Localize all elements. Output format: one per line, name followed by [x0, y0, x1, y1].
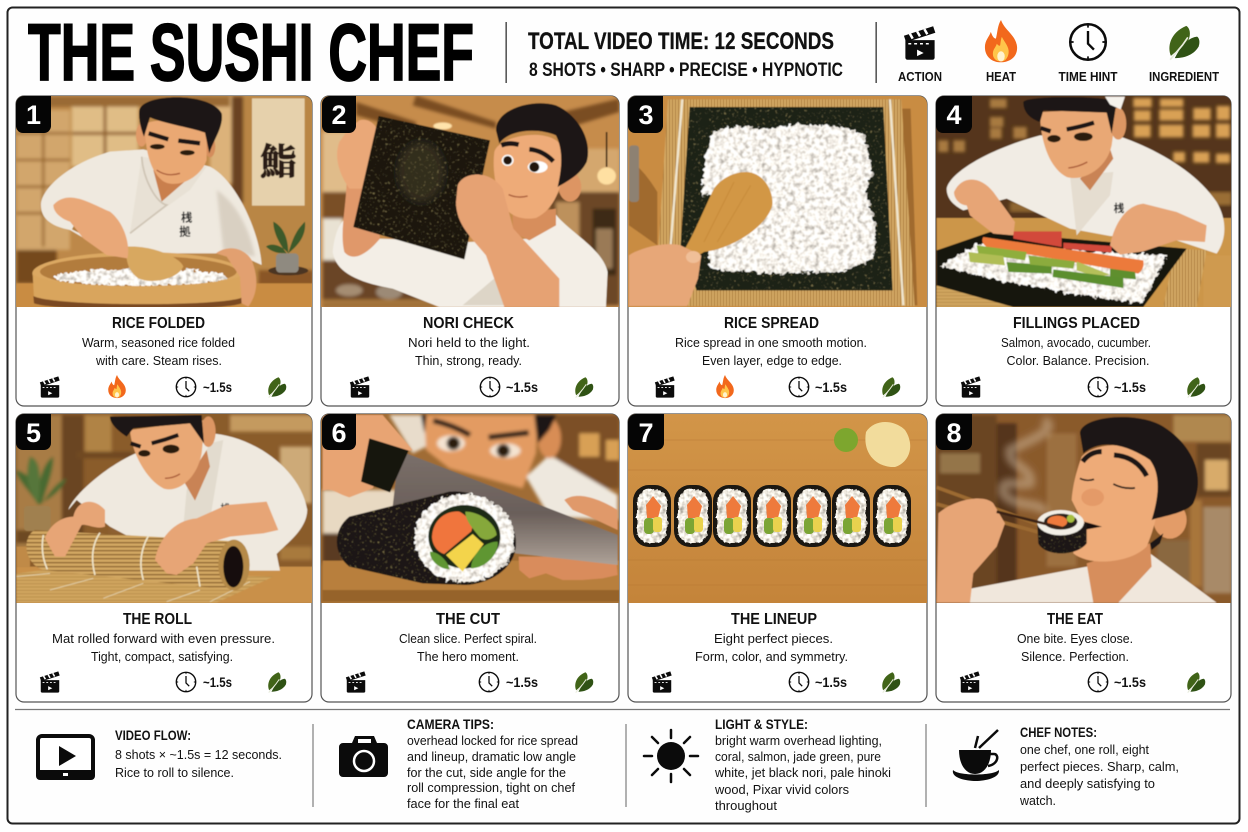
legend: heat: [985, 20, 1017, 84]
front hand: [323, 415, 413, 497]
caption 3: RICE SPREAD: [724, 315, 819, 332]
sushi pieces: [633, 485, 911, 547]
gown: [333, 215, 608, 307]
caption 3: Even layer, edge to edge.: [702, 353, 842, 368]
table: [937, 218, 1232, 308]
subtitle: total video time: TOTAL VIDEO TIME: 12 SECONDS: [528, 28, 834, 55]
footer: light and style: throughout: [715, 798, 777, 813]
footer: chef notes: perfect pieces. Sharp, calm,: [1020, 759, 1179, 774]
caption 5: Tight, compact, satisfying.: [91, 649, 233, 664]
legend: action: ACTION: [898, 69, 942, 84]
badge 4: [936, 96, 972, 133]
icon row 8: [960, 671, 1205, 693]
left arm and hand: [343, 179, 380, 257]
badge 1: [16, 96, 51, 133]
nori: [681, 107, 893, 290]
caption 8: One bite. Eyes close.: [1017, 631, 1133, 646]
panel: shot 1 rice folded: [10, 90, 323, 406]
panel: shot 6 the cut: [316, 410, 629, 702]
caption 3: Rice spread in one smooth motion.: [675, 335, 867, 350]
gown: [947, 135, 1224, 254]
footer: camera tips: [339, 716, 578, 811]
tub: [32, 252, 240, 282]
gown: [41, 149, 262, 265]
steam: [1003, 420, 1048, 513]
nori, rice, fillings: [937, 232, 1187, 307]
icon row 1: [40, 375, 286, 398]
nori sheet: [353, 116, 490, 259]
illustration: chef folding rice: 拠: [179, 224, 191, 240]
badge 7: 7: [638, 418, 654, 448]
panel: shot 7 the lineup: [628, 414, 927, 702]
caption 4: Color. Balance. Precision.: [1006, 353, 1150, 368]
knife: [393, 451, 618, 565]
icon: video tablet: [36, 736, 95, 780]
icon row 8: ~1.5s: [1114, 674, 1146, 690]
caption 3: [675, 315, 867, 368]
footer: camera tips: CAMERA TIPS:: [407, 716, 494, 732]
ear: [1153, 501, 1187, 539]
caption 8: THE EAT: [1047, 611, 1103, 628]
icon row 7: [652, 671, 900, 693]
footer: chef notes: one chef, one roll, eight: [1020, 742, 1149, 757]
face: [559, 172, 581, 202]
badge 5: [16, 414, 51, 450]
badge 6: [322, 414, 356, 450]
footer: video flow: VIDEO FLOW:: [115, 727, 191, 743]
title: THE SUSHI CHEF: [28, 8, 474, 98]
illustration: knife cutting the roll: [321, 414, 619, 603]
caption 1: with care. Steam rises.: [95, 353, 222, 368]
badge 2: 2: [331, 100, 347, 130]
footer: camera tips: face for the final eat: [407, 796, 519, 811]
legend: action: [898, 26, 942, 84]
footer: camera tips: for the cut, side angle for the: [407, 765, 566, 780]
illustration: chef holding nori: [316, 92, 629, 312]
caption 8: Silence. Perfection.: [1021, 649, 1129, 664]
badge 3: 3: [638, 100, 654, 130]
rice: [701, 125, 876, 274]
wasabi: [834, 428, 858, 452]
gown: [960, 553, 1217, 603]
panel: shot 2 nori check: [316, 92, 629, 406]
badge 8: [936, 414, 972, 450]
footer: video flow: [36, 727, 282, 780]
icon row 5: [40, 671, 286, 693]
icon row 4: [961, 376, 1205, 398]
panel: shot 8 the eat: [930, 410, 1243, 702]
icon row 5: ~1.5s: [203, 674, 232, 690]
footer: video flow: 8 shots × ~1.5s = 12 seconds.: [115, 747, 282, 762]
icon row 4: ~1.5s: [1114, 379, 1146, 395]
icon: cup with chopsticks: [953, 730, 999, 781]
paddle and hands: [72, 226, 80, 233]
caption 7: [695, 611, 848, 664]
icon: camera: [339, 736, 388, 777]
illustration: chef folding rice: 桟: [181, 210, 193, 226]
caption 1: RICE FOLDED: [112, 315, 205, 332]
icon row 1: ~1.5s: [203, 379, 232, 395]
icon row 3: ~1.5s: [815, 379, 847, 395]
caption 5: THE ROLL: [123, 611, 192, 628]
icon row 2: [350, 376, 593, 398]
footer: camera tips: roll compression, tight on chef: [407, 780, 575, 795]
icon row 6: [346, 671, 593, 693]
icon row 2: ~1.5s: [506, 379, 538, 395]
table: [17, 567, 313, 603]
table: [323, 561, 619, 602]
illustration: chef placing fillings: [930, 92, 1243, 312]
icon: sun: [644, 730, 698, 782]
footer: video flow: Rice to roll to silence.: [115, 765, 234, 780]
illustration: chef rolling the mat: 桟: [220, 500, 230, 514]
badge 3: [628, 96, 663, 133]
bamboo roll: [26, 530, 249, 590]
badge 2: [322, 96, 356, 133]
caption 4: [1001, 315, 1151, 368]
sushi roll: [337, 491, 516, 585]
flat mat: [17, 570, 273, 603]
badge 1: 1: [26, 100, 41, 130]
caption 7: Eight perfect pieces.: [714, 631, 833, 646]
caption 2: Thin, strong, ready.: [415, 353, 522, 368]
illustration: chef eating sushi: [930, 410, 1243, 610]
face: [130, 420, 205, 489]
legend: ingredient: INGREDIENT: [1149, 69, 1219, 84]
paddle: [685, 171, 773, 255]
hand and chopsticks: [937, 487, 1040, 533]
footer: light and style: wood, Pixar vivid colors: [714, 782, 849, 797]
panel: shot 4 fillings placed: [930, 92, 1243, 406]
sushi bite: [1037, 523, 1087, 553]
caption 8: [1017, 611, 1133, 664]
hands and arms: [45, 502, 105, 557]
badge 6: 6: [331, 418, 347, 448]
gown: [68, 433, 307, 571]
badge 7: [628, 414, 664, 450]
caption 1: [82, 315, 235, 368]
face: [1040, 109, 1117, 178]
caption 4: FILLINGS PLACED: [1013, 315, 1140, 332]
footer: light and style: coral, salmon, jade green, pure: [715, 749, 881, 764]
footer: camera tips: and lineup, dramatic low angle: [407, 749, 576, 764]
caption 6: The hero moment.: [417, 649, 519, 664]
caption 5: Mat rolled forward with even pressure.: [52, 631, 275, 646]
footer: light and style: bright warm overhead lighting,: [715, 733, 882, 748]
caption 5: [52, 611, 275, 664]
back hand: [564, 496, 618, 530]
legend: heat: HEAT: [986, 69, 1016, 84]
footer: chef notes: CHEF NOTES:: [1020, 724, 1097, 740]
badge 5: 5: [26, 418, 41, 448]
legend: time hint: [1058, 24, 1118, 84]
illustration: sushi pieces lined up: [628, 414, 927, 603]
icon row 6: ~1.5s: [506, 674, 538, 690]
icon row 3: [655, 375, 900, 398]
caption 6: [399, 611, 537, 664]
subtitle: shot summary: 8 SHOTS • SHARP • PRECISE • HYPNOTIC: [529, 60, 843, 81]
footer: chef notes: and deeply satisfying to: [1020, 776, 1155, 791]
banner: 鮨: [260, 134, 296, 185]
caption 7: Form, color, and symmetry.: [695, 649, 848, 664]
ginger: [865, 422, 910, 467]
illustration: rice spread on nori: [624, 92, 937, 312]
icon row 7: ~1.5s: [815, 674, 847, 690]
footer: light and style: LIGHT & STYLE:: [715, 716, 808, 732]
right hand and arm: [456, 174, 559, 307]
footer: light and style: white, jet black nori, pale hinoki: [714, 765, 891, 780]
panel: shot 3 rice spread: [624, 92, 937, 406]
banner: [252, 98, 305, 206]
caption 2: NORI CHECK: [423, 315, 514, 332]
badge 8: 8: [946, 418, 962, 448]
legend: time hint: TIME HINT: [1058, 69, 1118, 84]
illustration: chef placing fillings: 桟: [1114, 201, 1125, 216]
panel: shot 5 the roll: [10, 410, 323, 702]
footer: camera tips: overhead locked for rice spread: [407, 733, 578, 748]
caption 2: Nori held to the light.: [408, 335, 530, 350]
badge 4: 4: [946, 100, 962, 130]
legend: ingredient: [1149, 26, 1219, 84]
caption 1: Warm, seasoned rice folded: [82, 335, 235, 350]
caption 7: THE LINEUP: [731, 611, 817, 628]
caption 4: Salmon, avocado, cucumber.: [1001, 335, 1151, 350]
face: [1072, 445, 1160, 562]
illustration: chef folding rice: [10, 90, 323, 310]
illustration: chef rolling the mat: [16, 414, 312, 603]
caption 6: THE CUT: [436, 611, 500, 628]
hands: [954, 179, 1015, 235]
header: [28, 8, 1219, 98]
caption 2: [408, 315, 530, 368]
footer: chef notes: watch.: [1019, 793, 1056, 808]
face: [136, 123, 147, 147]
fingers under blade: [519, 557, 618, 580]
caption 6: Clean slice. Perfect spiral.: [399, 631, 537, 646]
footer: chef notes: [953, 724, 1179, 808]
footer: light and style: [644, 716, 891, 813]
hand: [629, 244, 701, 306]
